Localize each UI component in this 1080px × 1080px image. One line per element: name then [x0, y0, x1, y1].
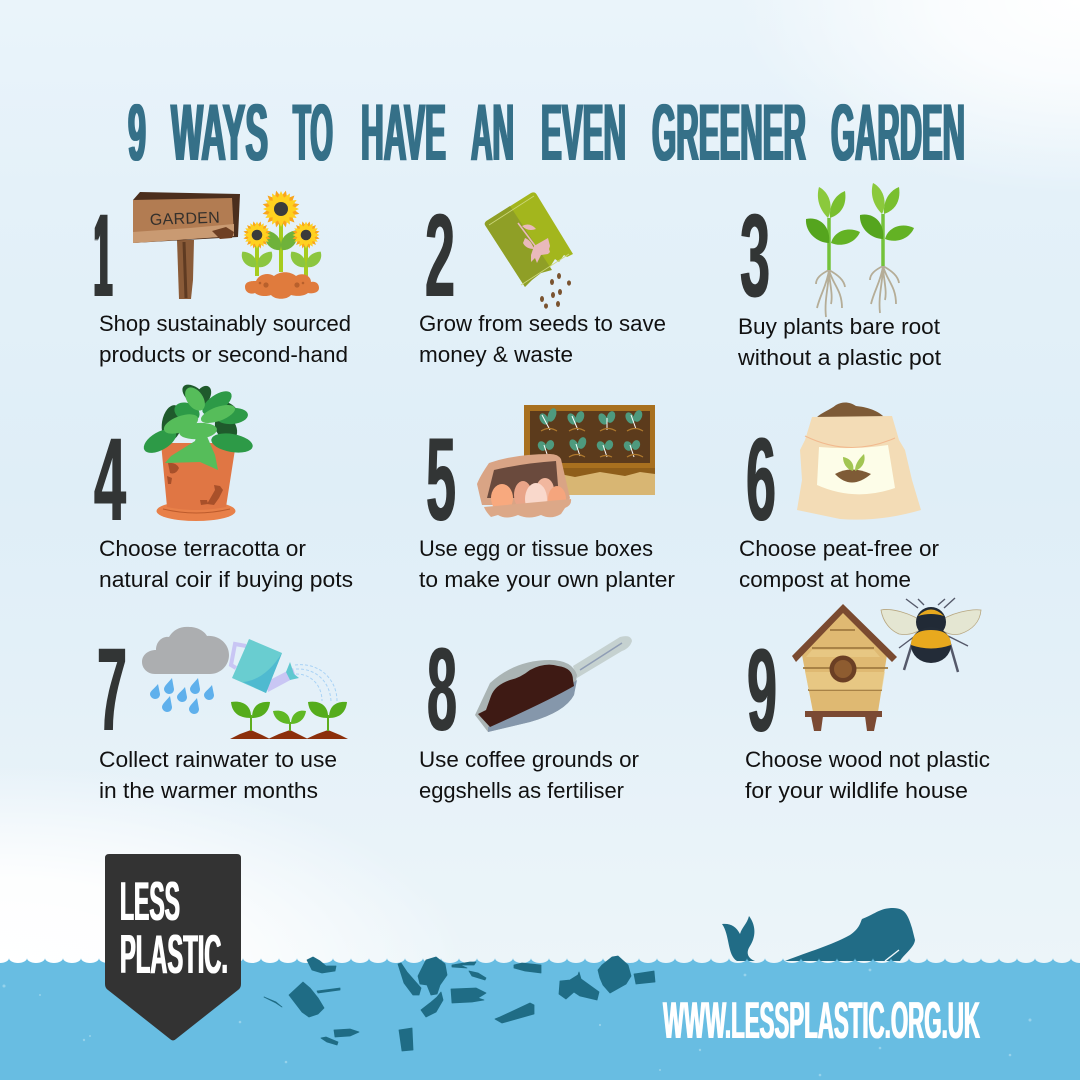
- title: 9: [128, 88, 146, 178]
- tip 9: 9: [747, 625, 777, 757]
- icon: seed packet: [485, 192, 573, 309]
- caption 2: [419, 311, 666, 367]
- icon: bare-root seedlings: [806, 183, 914, 317]
- caption 6: Choose peat-free or: [739, 536, 939, 561]
- logo wordmark: [120, 870, 228, 985]
- caption 6: compost at home: [739, 567, 911, 592]
- caption 9: [745, 747, 990, 803]
- icon: wooden wildlife house: [792, 604, 897, 731]
- tip 7: [97, 624, 348, 803]
- caption 2: money & waste: [419, 342, 573, 367]
- tip 9: [745, 598, 990, 803]
- tip 6: [739, 402, 939, 592]
- caption 5: [419, 536, 676, 592]
- tip 2: 2: [425, 190, 455, 322]
- title: HAVE: [361, 88, 446, 178]
- caption 4: Choose terracotta or: [99, 536, 307, 561]
- icon: sunflowers: [238, 186, 325, 299]
- title: [128, 88, 965, 178]
- caption 2: Grow from seeds to save: [419, 311, 666, 336]
- tip 8: 8: [427, 624, 457, 756]
- icon: wooden garden sign: [133, 192, 240, 299]
- caption 8: Use coffee grounds or: [419, 747, 640, 772]
- tip 3: [737, 183, 942, 370]
- icon: bumblebee: [881, 598, 981, 672]
- caption 8: [419, 747, 640, 803]
- tip 8: [419, 624, 640, 803]
- tip 1: [94, 186, 351, 367]
- caption 7: [99, 747, 337, 803]
- caption 7: in the warmer months: [99, 778, 318, 803]
- title: WAYS: [171, 88, 268, 178]
- icon: watering can and seedlings: [230, 639, 348, 739]
- caption 1: Shop sustainably sourced: [99, 311, 351, 336]
- whale: [722, 908, 915, 961]
- caption 6: [739, 536, 939, 592]
- title: GREENER: [652, 88, 806, 178]
- title: AN: [471, 88, 514, 178]
- caption 3: [737, 314, 942, 370]
- Less Plastic logo badge: [105, 854, 241, 1040]
- caption 3: without a plastic pot: [737, 345, 942, 370]
- tip 7: 7: [97, 624, 127, 756]
- plastic waste in the sea: [264, 956, 655, 1051]
- caption 9: for your wildlife house: [745, 778, 968, 803]
- caption 7: Collect rainwater to use: [99, 747, 337, 772]
- water: [0, 958, 1080, 1080]
- tip 3: 3: [740, 190, 770, 322]
- infographic canvas: PLASTIC.: [120, 923, 228, 985]
- caption 9: Choose wood not plastic: [745, 747, 990, 772]
- caption 3: Buy plants bare root: [738, 314, 941, 339]
- logo wordmark: LESS: [120, 870, 180, 932]
- icon: sack of peat-free compost: [797, 402, 921, 520]
- tip 6: 6: [746, 414, 776, 546]
- tip 2: [419, 190, 666, 367]
- icon: rain cloud: [142, 627, 229, 714]
- icon: wooden garden sign: GARDEN: [150, 210, 220, 229]
- tip 4: [94, 380, 353, 592]
- tip 1: 1: [94, 190, 112, 322]
- tip 5: 5: [426, 414, 456, 546]
- caption 1: products or second-hand: [99, 342, 348, 367]
- caption 5: to make your own planter: [419, 567, 676, 592]
- water texture: [2, 969, 1032, 1076]
- caption 8: eggshells as fertiliser: [419, 778, 624, 803]
- caption 4: [99, 536, 353, 592]
- title: EVEN: [541, 88, 626, 178]
- title: TO: [293, 88, 333, 178]
- icon: terracotta pot with plant: [140, 380, 254, 521]
- caption 5: Use egg or tissue boxes: [419, 536, 653, 561]
- caption 4: natural coir if buying pots: [99, 567, 353, 592]
- caption 1: [99, 311, 351, 367]
- tip 5: [419, 405, 676, 592]
- icon: planter box and egg carton: [477, 405, 655, 518]
- icon: scoop of coffee grounds: [475, 636, 632, 732]
- tip 4: 4: [94, 414, 126, 546]
